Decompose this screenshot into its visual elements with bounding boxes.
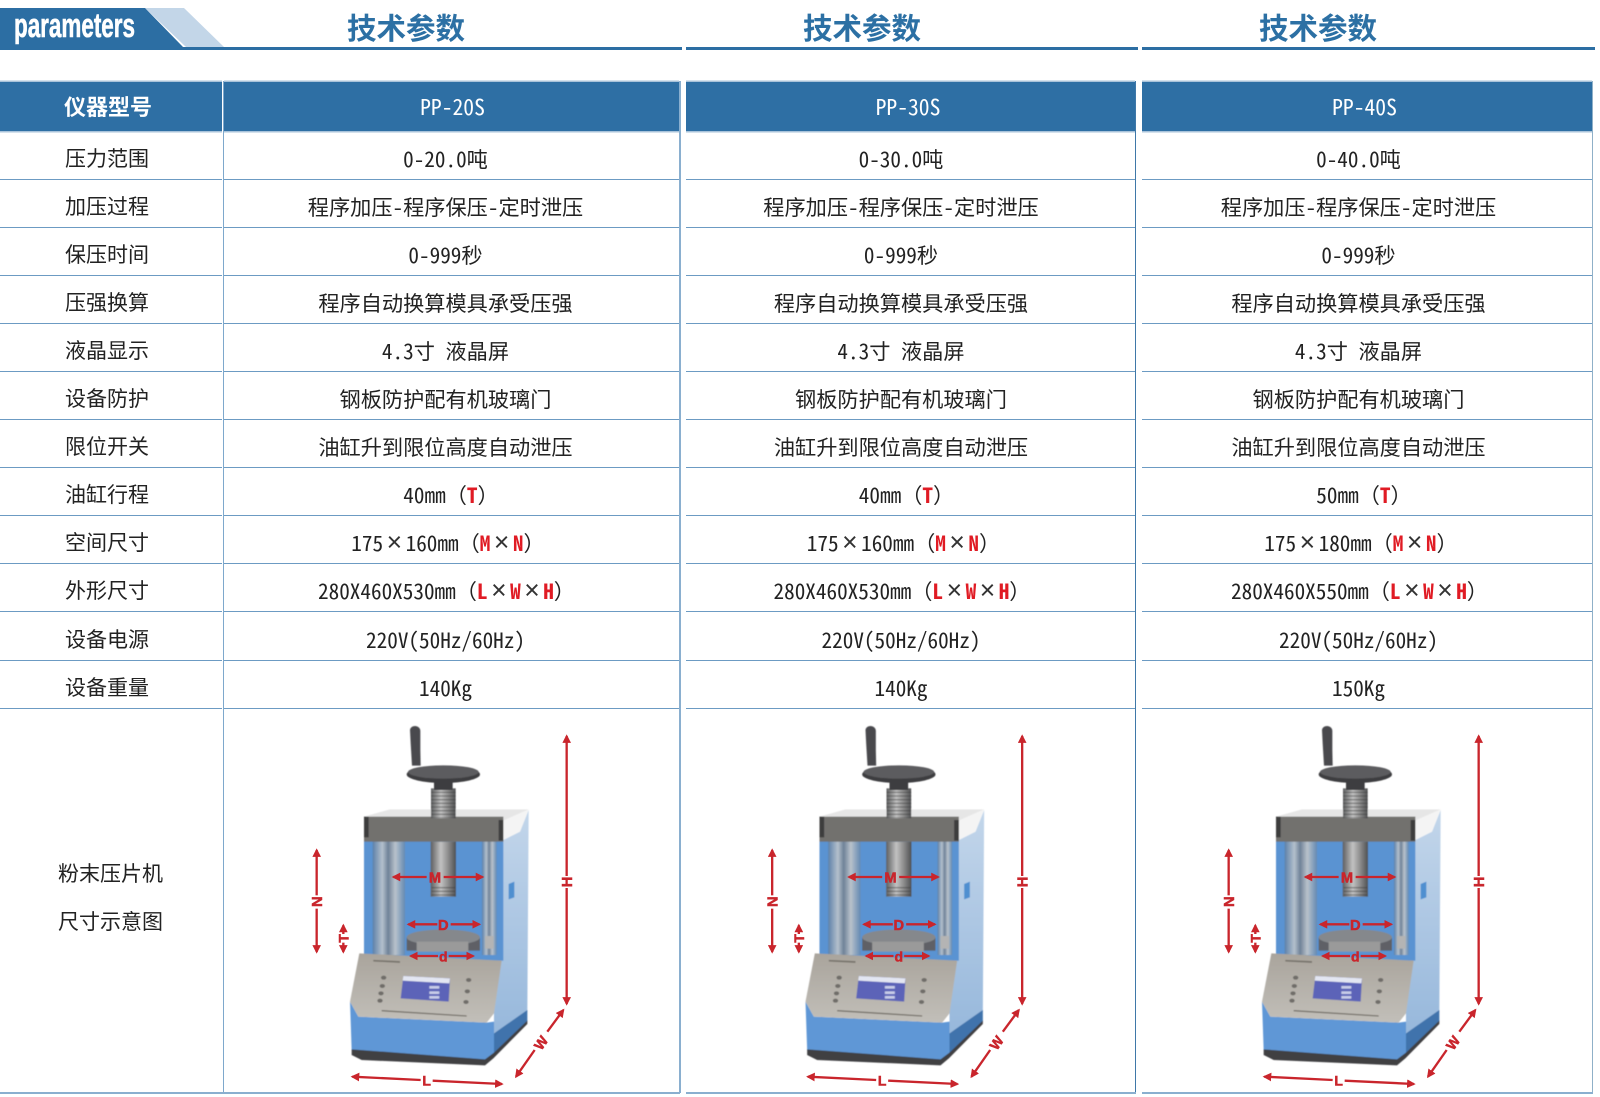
model header: PP-30S: [876, 91, 940, 122]
value: weight: 150Kg: [1332, 672, 1385, 703]
value: power: 220V(50Hz/60Hz): [366, 624, 525, 654]
header underline: column 3: [1142, 47, 1594, 50]
value: power: [224, 612, 679, 661]
label: pressure conversion: 压强换算: [65, 287, 149, 317]
value: weight: [686, 661, 1135, 709]
dimension arrow T: T: [791, 934, 807, 943]
value: outer size: ×: [947, 575, 962, 605]
label: LCD display: [0, 324, 222, 372]
value: holding time: [224, 228, 679, 276]
value: space size: ×: [387, 527, 402, 557]
caption line 1: 粉末压片机: [58, 858, 163, 888]
value: space size: [1142, 516, 1592, 564]
value: protection: [1142, 372, 1592, 420]
dimension arrow d: d: [439, 948, 448, 964]
label: outer size: 外形尺寸: [65, 575, 149, 605]
value: stroke: [686, 468, 1135, 516]
value: outer size: [686, 564, 1135, 612]
diagram: PP-30S press with dimensions: [765, 726, 1031, 1089]
label: pressure range: [0, 132, 222, 180]
value: pressure range: [224, 132, 679, 180]
dimension arrow W: W: [986, 1032, 1007, 1053]
caption line 2: 尺寸示意图: [58, 906, 163, 936]
dimension arrow N: N: [765, 896, 781, 907]
label: protection: [0, 372, 222, 420]
dimension arrow N: [1222, 850, 1238, 952]
value: process: 程序加压-程序保压-定时泄压: [1221, 191, 1496, 222]
value: stroke: 40mm（T）: [859, 479, 954, 510]
label: limit switch: 限位开关: [65, 431, 149, 461]
dimension arrow D: D: [1350, 918, 1361, 934]
value: outer size: 280X460X550mm（L W H）: [1231, 575, 1488, 606]
value: space size: [224, 516, 679, 564]
dimension arrow W: W: [1443, 1032, 1464, 1053]
dimension arrow H: H: [1015, 877, 1031, 887]
heading: column 3: 技术参数: [1259, 6, 1377, 48]
value: outer size: 280X460X530mm（L W H）: [318, 575, 575, 606]
label header: 仪器型号: 仪器型号: [64, 90, 152, 122]
value: holding time: 0-999秒: [864, 239, 938, 270]
dimension arrow L: L: [878, 1073, 887, 1089]
dimension arrow W: [971, 1010, 1019, 1077]
panel: row labels: [0, 80, 222, 936]
dimension arrow D: [408, 918, 479, 934]
label: space size: [0, 516, 222, 564]
label: pressing process: [0, 180, 222, 228]
value: pressure range: 0-40.0吨: [1316, 142, 1401, 174]
header underline: column 1: [0, 47, 682, 50]
value: process: [224, 180, 679, 228]
value: LCD: 4.3寸 液晶屏: [382, 335, 509, 366]
label: cylinder stroke: 油缸行程: [65, 479, 149, 509]
value: stroke: [1142, 468, 1592, 516]
label: holding time: 保压时间: [65, 239, 149, 269]
label: protection: 设备防护: [65, 383, 149, 413]
value: outer size: ×: [1437, 575, 1453, 605]
dimension arrow D: [864, 918, 935, 934]
dimension arrow D: D: [894, 918, 904, 934]
value: limit switch: 油缸升到限位高度自动泄压: [774, 431, 1028, 462]
dimension arrow M: M: [1341, 870, 1353, 886]
label: weight: [0, 661, 222, 709]
dimension arrow d: d: [1351, 948, 1360, 964]
machine photo: [1262, 726, 1441, 1065]
value: power: 220V(50Hz/60Hz): [1279, 624, 1438, 654]
value: outer size: ×: [524, 575, 540, 605]
value: limit switch: [1142, 420, 1592, 468]
value: conversion: [224, 276, 679, 324]
dimension arrow M: [1305, 870, 1395, 886]
label: cylinder stroke: [0, 468, 222, 516]
value: protection: 钢板防护配有机玻璃门: [795, 383, 1007, 414]
value: power: 220V(50Hz/60Hz): [822, 624, 980, 654]
value: process: 程序加压-程序保压-定时泄压: [763, 191, 1039, 222]
value: space size: ×: [842, 527, 858, 557]
value: LCD: [1142, 324, 1592, 372]
caption: schematic diagram: [58, 858, 163, 936]
value: holding time: 0-999秒: [408, 239, 483, 270]
value: space size: 175 160mm（M N）: [807, 527, 1000, 558]
dimension arrow T: T: [1247, 934, 1263, 943]
dimension arrow W: [1428, 1010, 1475, 1077]
value: LCD: [686, 324, 1135, 372]
dimension arrow T: [335, 925, 351, 952]
label header: 仪器型号: [0, 82, 222, 131]
label: holding time: [0, 228, 222, 276]
dimension arrow M: M: [429, 870, 441, 886]
label: weight: 设备重量: [65, 672, 149, 702]
dimension arrow W: [516, 1010, 563, 1077]
dimension arrow L: [808, 1073, 957, 1089]
dimension arrow N: N: [310, 896, 326, 907]
banner text: parameters: [14, 7, 135, 45]
value: power: [1142, 612, 1592, 661]
value: outer size: [1142, 564, 1592, 612]
dimension arrow H: H: [1472, 877, 1488, 887]
machine photo: [350, 726, 529, 1065]
value: outer size: [224, 564, 679, 612]
value: LCD: 4.3寸 液晶屏: [1295, 335, 1422, 366]
value: space size: 175 180mm（M N）: [1264, 527, 1458, 558]
value: LCD: 4.3寸 液晶屏: [837, 335, 965, 366]
value: limit switch: [224, 420, 679, 468]
dimension arrow D: [1320, 918, 1391, 934]
label: pressure conversion: [0, 276, 222, 324]
value: protection: [686, 372, 1135, 420]
diagram: PP-20S press with dimensions: [310, 726, 576, 1089]
dimension arrow N: N: [1222, 896, 1238, 907]
model header: [1142, 82, 1592, 131]
value: weight: 140Kg: [419, 672, 472, 703]
dimension arrow M: [849, 870, 938, 886]
dimension arrow T: T: [335, 934, 351, 943]
value: weight: 140Kg: [874, 672, 927, 703]
value: pressure range: 0-20.0吨: [403, 142, 488, 174]
value: space size: ×: [494, 527, 509, 557]
label: pressure range: 压力范围: [65, 142, 149, 172]
dimension arrow T: [791, 925, 807, 952]
panel: PP-20S: [224, 80, 679, 709]
value: outer size: ×: [491, 575, 507, 605]
value: power: [686, 612, 1135, 661]
value: conversion: [686, 276, 1135, 324]
label: pressing process: 加压过程: [65, 191, 149, 221]
value: space size: ×: [949, 527, 965, 557]
label: outer size: [0, 564, 222, 612]
value: stroke: 40mm（T）: [403, 479, 499, 510]
value: protection: 钢板防护配有机玻璃门: [1253, 383, 1464, 414]
value: process: [1142, 180, 1592, 228]
value: space size: ×: [1407, 527, 1422, 557]
value: conversion: 程序自动换算模具承受压强: [1231, 287, 1486, 318]
value: process: [686, 180, 1135, 228]
value: protection: [224, 372, 679, 420]
dimension arrow L: L: [1334, 1073, 1343, 1089]
model header: [686, 82, 1135, 131]
dimension arrow D: D: [438, 918, 449, 934]
value: conversion: [1142, 276, 1592, 324]
label: limit switch: [0, 420, 222, 468]
value: conversion: 程序自动换算模具承受压强: [774, 287, 1028, 318]
dimension arrow L: [352, 1073, 502, 1089]
dimension arrow H: H: [560, 877, 576, 887]
label: power supply: 设备电源: [65, 624, 149, 654]
dimension arrow N: [310, 850, 326, 952]
value: holding time: [1142, 228, 1592, 276]
value: stroke: [224, 468, 679, 516]
value: limit switch: 油缸升到限位高度自动泄压: [318, 431, 573, 462]
value: weight: [224, 661, 679, 709]
model header: PP-20S: [420, 91, 485, 122]
dimension arrow M: M: [884, 870, 897, 886]
banner: parameters tab: [0, 7, 224, 47]
machine photo: [805, 726, 984, 1065]
dimension arrow N: [765, 850, 781, 952]
value: outer size: ×: [1404, 575, 1420, 605]
value: space size: 175 160mm（M N）: [351, 527, 545, 558]
label: power supply: [0, 612, 222, 661]
panel: PP-30S: [686, 80, 1135, 709]
value: holding time: [686, 228, 1135, 276]
value: space size: ×: [1300, 527, 1315, 557]
dimension arrow d: d: [895, 948, 903, 964]
header underline: column 2: [686, 47, 1138, 50]
value: holding time: 0-999秒: [1321, 239, 1396, 270]
heading: column 2: 技术参数: [803, 6, 921, 48]
value: limit switch: [686, 420, 1135, 468]
dimension arrow L: [1264, 1073, 1414, 1089]
dimension arrow d: [411, 948, 473, 964]
diagram: PP-40S press with dimensions: [1222, 726, 1488, 1089]
value: pressure range: [1142, 132, 1592, 180]
model header: [224, 82, 679, 131]
label: space size: 空间尺寸: [65, 527, 149, 557]
value: process: 程序加压-程序保压-定时泄压: [308, 191, 583, 222]
value: outer size: ×: [980, 575, 995, 605]
label: LCD display: 液晶显示: [65, 335, 149, 365]
dimension arrow L: L: [422, 1073, 431, 1089]
dimension arrow M: [393, 870, 483, 886]
heading: column 1: 技术参数: [347, 6, 465, 48]
value: outer size: 280X460X530mm（L W H）: [774, 575, 1030, 606]
dimension arrow W: W: [531, 1032, 552, 1053]
dimension arrow d: [1323, 948, 1385, 964]
value: space size: [686, 516, 1135, 564]
dimension arrow T: [1247, 925, 1263, 952]
value: limit switch: 油缸升到限位高度自动泄压: [1231, 431, 1486, 462]
value: weight: [1142, 661, 1592, 709]
value: protection: 钢板防护配有机玻璃门: [340, 383, 551, 414]
dimension arrow d: [866, 948, 929, 964]
model header: PP-40S: [1332, 91, 1397, 122]
value: pressure range: [686, 132, 1135, 180]
value: stroke: 50mm（T）: [1316, 479, 1412, 510]
value: pressure range: 0-30.0吨: [859, 142, 943, 174]
panel: PP-40S: [1142, 80, 1592, 709]
value: LCD: [224, 324, 679, 372]
value: conversion: 程序自动换算模具承受压强: [318, 287, 573, 318]
